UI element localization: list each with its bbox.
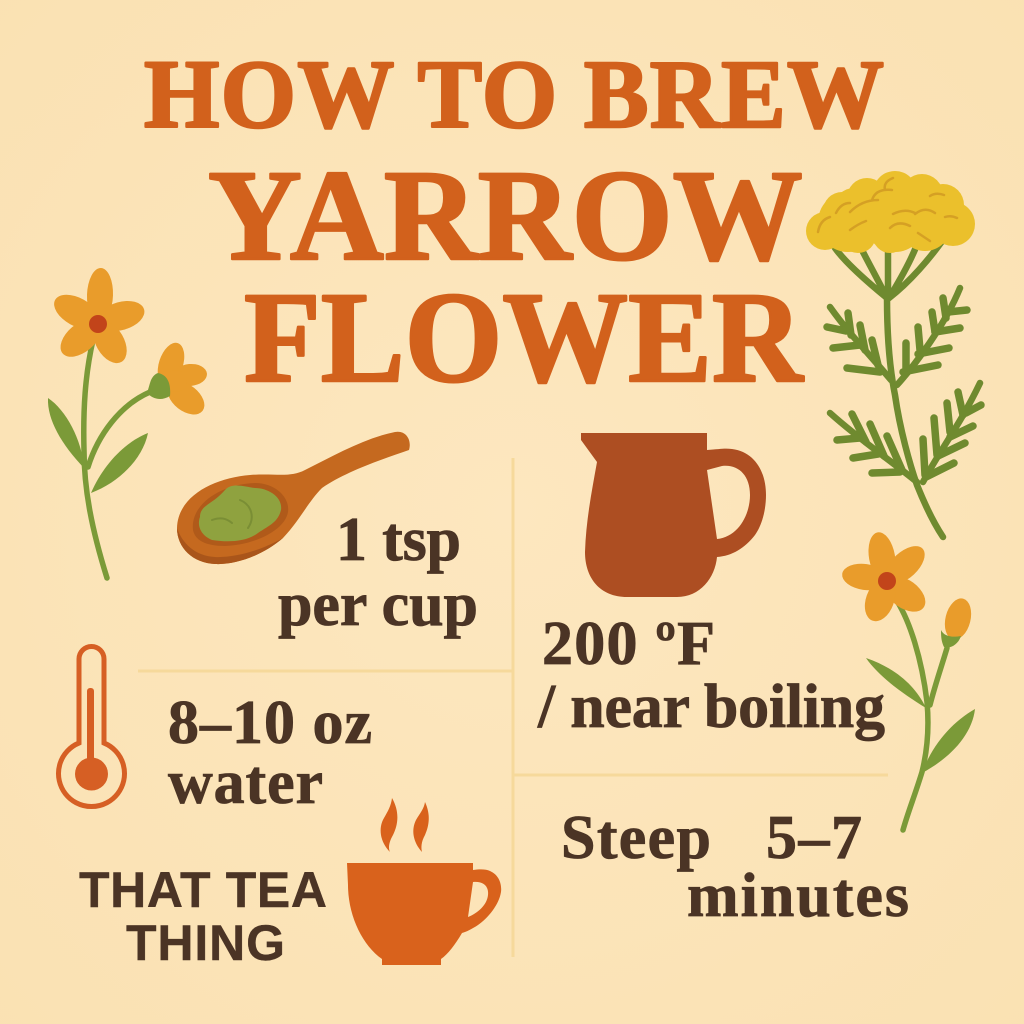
- icon: wooden spoon: [177, 432, 410, 564]
- text: water amount: 8–10 oz: [168, 689, 372, 757]
- icon: tea cup with steam: [347, 798, 501, 965]
- brand: That Tea Thing: [79, 862, 327, 971]
- icon: brown pitcher: [581, 433, 766, 597]
- dividers: [138, 458, 888, 957]
- text: steep time: minutes: [687, 862, 909, 930]
- icon: orange flower lower right: [840, 530, 975, 830]
- text: water amount: water: [168, 749, 323, 817]
- title: HOW TO BREW: [144, 41, 884, 148]
- text: temperature: [537, 610, 885, 741]
- icon: thermometer: [59, 646, 125, 807]
- text: steep time: Steep: [561, 804, 711, 872]
- title: [144, 41, 884, 409]
- text: temperature: / near boiling: [537, 673, 885, 741]
- text: steep time: 5–7: [766, 804, 862, 872]
- text: water amount: [168, 689, 372, 817]
- title: FLOWER: [244, 265, 804, 409]
- icon: yarrow plant right: [806, 171, 981, 537]
- text: temperature: 200 ºF: [542, 610, 715, 678]
- title: YARROW: [208, 144, 803, 288]
- brand: That Tea Thing: THING: [126, 915, 285, 971]
- text: 1 tsp per cup: 1 tsp: [336, 506, 461, 574]
- brand: That Tea Thing: THAT TEA: [79, 862, 327, 918]
- text: steep time: [561, 804, 909, 930]
- icon: orange flowers left: [48, 268, 211, 578]
- text: 1 tsp per cup: per cup: [278, 571, 478, 639]
- text: 1 tsp per cup: [278, 506, 478, 639]
